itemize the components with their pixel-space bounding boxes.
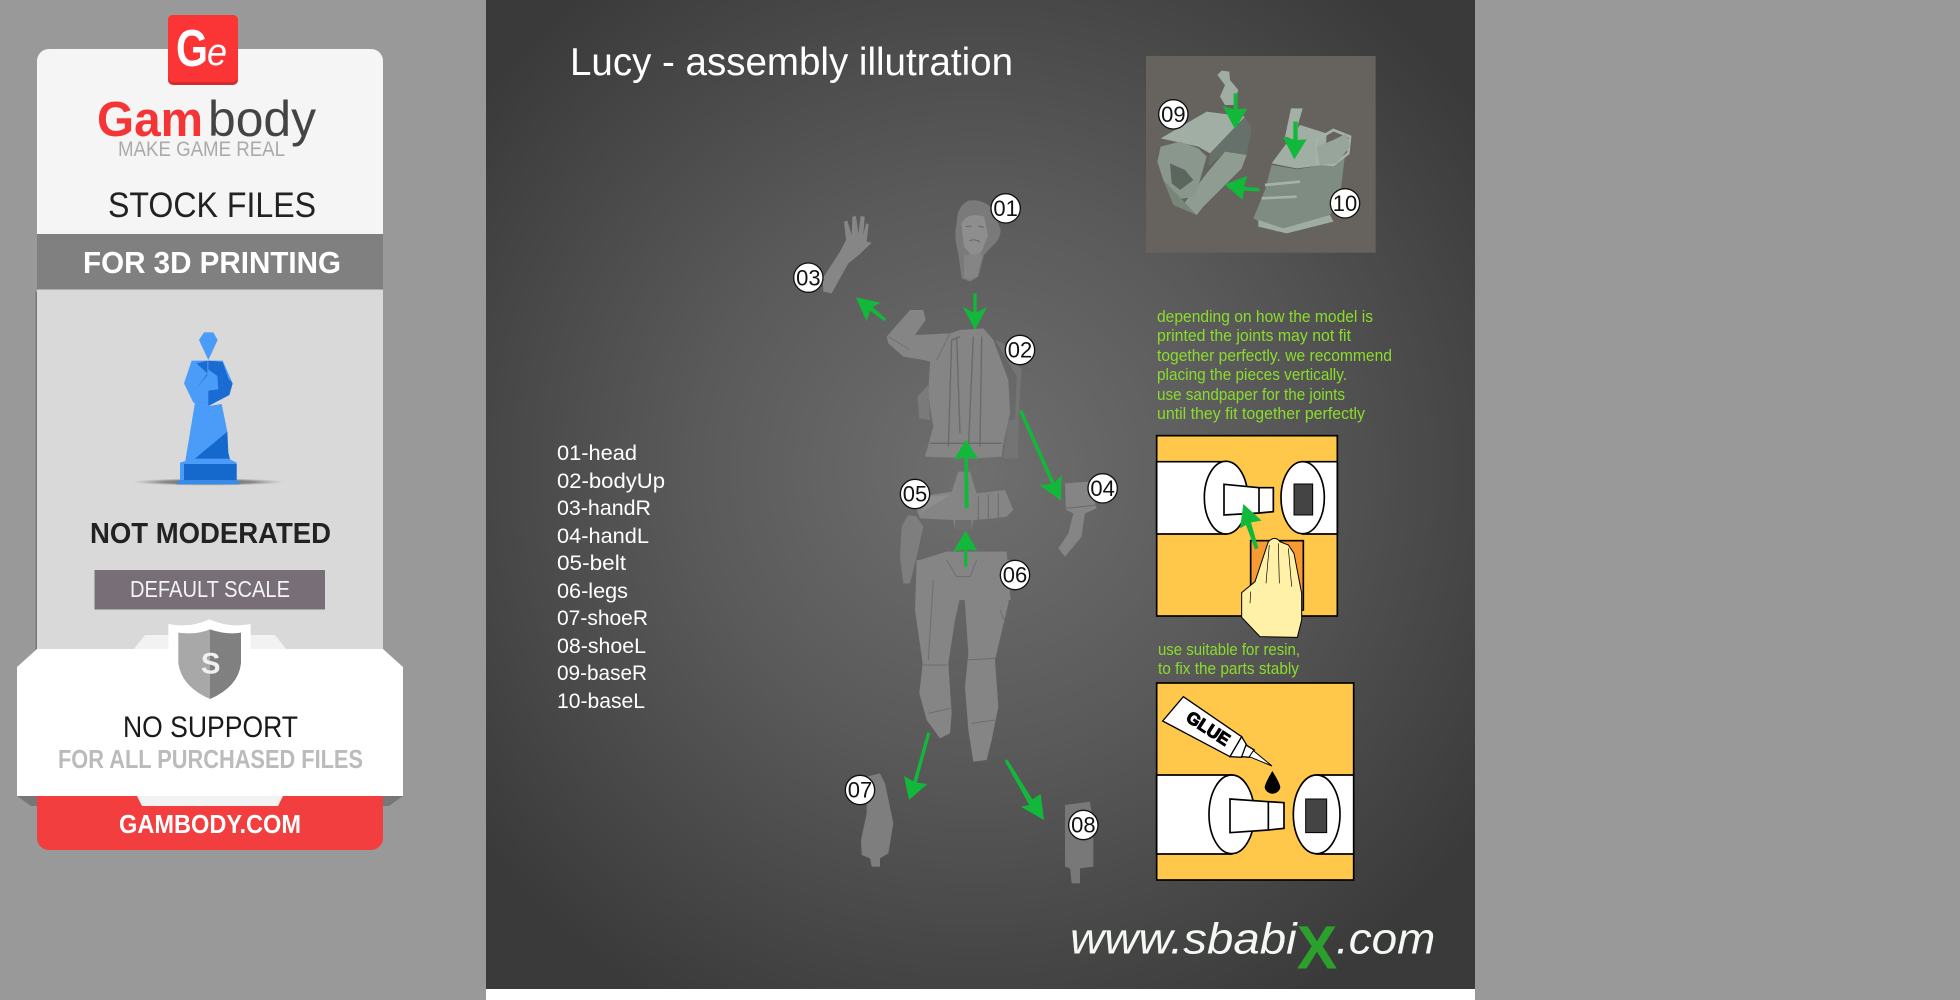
subheading: for all purchased files: FOR ALL PURCHASED FILES <box>58 744 363 774</box>
number labels <box>794 194 1117 590</box>
arrow: belt to body <box>954 439 978 508</box>
icon: Ge logo: G <box>176 20 208 78</box>
text: glue advice <box>1158 641 1300 678</box>
part: hips <box>916 552 1011 600</box>
logo wordmark Gambody: body <box>208 91 316 147</box>
text: glue advice: use suitable for resin, <box>1158 641 1300 659</box>
arrow: legs to belt <box>953 531 977 567</box>
arrows on bases <box>1223 93 1307 200</box>
card light grey section <box>37 289 383 654</box>
part: base R <box>1157 71 1252 215</box>
label 03: 03 <box>796 265 821 290</box>
part: head <box>955 200 1001 282</box>
part: right leg <box>963 560 1012 762</box>
footer label: gambody.com: GAMBODY.COM <box>119 809 301 839</box>
badge: default scale: DEFAULT SCALE <box>130 576 290 602</box>
label 07: 07 <box>848 778 872 803</box>
parts list <box>557 441 665 713</box>
card top white section <box>37 49 383 234</box>
part: shoe left <box>1065 802 1093 883</box>
heading: stock files: STOCK FILES <box>108 186 316 225</box>
text: sandpaper advice: printed the joints may not fit <box>1157 327 1351 345</box>
figure: upper body parts <box>823 200 1097 600</box>
tagline: MAKE GAME REAL <box>118 138 285 161</box>
part: shoe right <box>861 773 893 867</box>
icon: support shield: S <box>201 647 220 680</box>
label 05: 05 <box>903 482 927 507</box>
text: sandpaper advice: until they fit together perfectly <box>1157 405 1366 423</box>
panel: Gambody product card <box>17 15 403 850</box>
title: Lucy - assembly illutration <box>570 41 1013 84</box>
parts list: 04-handL <box>557 524 649 548</box>
label 08: 08 <box>1071 813 1096 838</box>
figure: lower body parts <box>861 560 1093 883</box>
website logo <box>1070 914 1435 983</box>
icon: glue tube: GLUE <box>1183 707 1234 750</box>
diagram: gluing joints <box>1157 683 1354 880</box>
website logo: www.sbabi <box>1070 914 1298 963</box>
diagram: sanding joints <box>1157 436 1337 637</box>
icon: Ge logo: e <box>207 32 227 74</box>
text: sandpaper advice: placing the pieces vertically. <box>1157 366 1347 384</box>
parts list: 10-baseL <box>557 689 645 713</box>
ribbon fold shadows <box>17 796 403 806</box>
heading: no support: NO SUPPORT <box>123 711 298 744</box>
text: sandpaper advice: together perfectly. we recommend <box>1157 347 1392 365</box>
heading: not moderated: NOT MODERATED <box>90 518 331 550</box>
part: left leg <box>915 560 963 738</box>
label 09: 09 <box>1161 102 1186 127</box>
icon: glue drop <box>1265 771 1280 794</box>
parts list: 03-handR <box>557 496 651 520</box>
part: right hand <box>823 216 872 293</box>
panel: assembly illustration <box>486 0 1475 1000</box>
website logo: .com <box>1336 914 1435 963</box>
arrow: to shoe R <box>904 732 930 800</box>
text: glue advice: to fix the parts stably <box>1158 660 1300 678</box>
logo wordmark Gambody: Gam <box>97 93 203 147</box>
arrows: shoes <box>904 732 1044 820</box>
banner: for 3D printing <box>37 234 383 290</box>
red footer bar <box>37 790 383 850</box>
icon: hand <box>1242 538 1302 637</box>
parts list: 07-shoeR <box>557 606 648 630</box>
part: holster <box>900 515 923 583</box>
parts list: 09-baseR <box>557 661 647 685</box>
text: sandpaper advice: use sandpaper for the joints <box>1157 386 1345 404</box>
part: torso <box>887 310 1022 458</box>
banner: for 3D printing: FOR 3D PRINTING <box>83 245 341 280</box>
leg creases <box>923 560 1005 723</box>
arrow: to hand L <box>1019 410 1062 501</box>
parts list: 08-shoeL <box>557 634 646 658</box>
parts list: 01-head <box>557 441 637 465</box>
label 04: 04 <box>1090 476 1115 501</box>
parts list: 02-bodyUp <box>557 469 665 493</box>
photo: base parts <box>1146 56 1376 253</box>
number labels: shoes <box>845 775 1098 840</box>
part: left hand <box>1058 482 1097 557</box>
arrow: to hand R <box>856 297 886 322</box>
icon: Ge logo <box>168 15 238 85</box>
icon: blue low-poly statue <box>132 332 285 486</box>
badge: default scale <box>94 570 325 610</box>
parts list: 05-belt <box>557 551 626 575</box>
label 10: 10 <box>1333 191 1357 216</box>
icon: support shield <box>168 619 251 703</box>
sandpaper <box>1251 541 1303 610</box>
arrow: head to body <box>963 293 987 330</box>
parts list: 06-legs <box>557 579 628 603</box>
website logo: X <box>1297 914 1337 983</box>
part: base L <box>1253 108 1350 233</box>
arrow: to shoe L <box>1005 759 1044 820</box>
label 01: 01 <box>993 196 1018 221</box>
white ribbon <box>17 649 403 796</box>
logo wordmark Gambody <box>97 91 316 147</box>
label 06: 06 <box>1003 563 1027 588</box>
text: sandpaper advice <box>1157 308 1392 423</box>
arrows: upper body <box>856 293 1062 567</box>
icon: glue tube <box>1163 697 1272 766</box>
arrow on joint <box>1240 504 1262 549</box>
label 02: 02 <box>1008 338 1032 363</box>
part: belt <box>917 472 1013 530</box>
text: sandpaper advice: depending on how the model is <box>1157 308 1373 326</box>
